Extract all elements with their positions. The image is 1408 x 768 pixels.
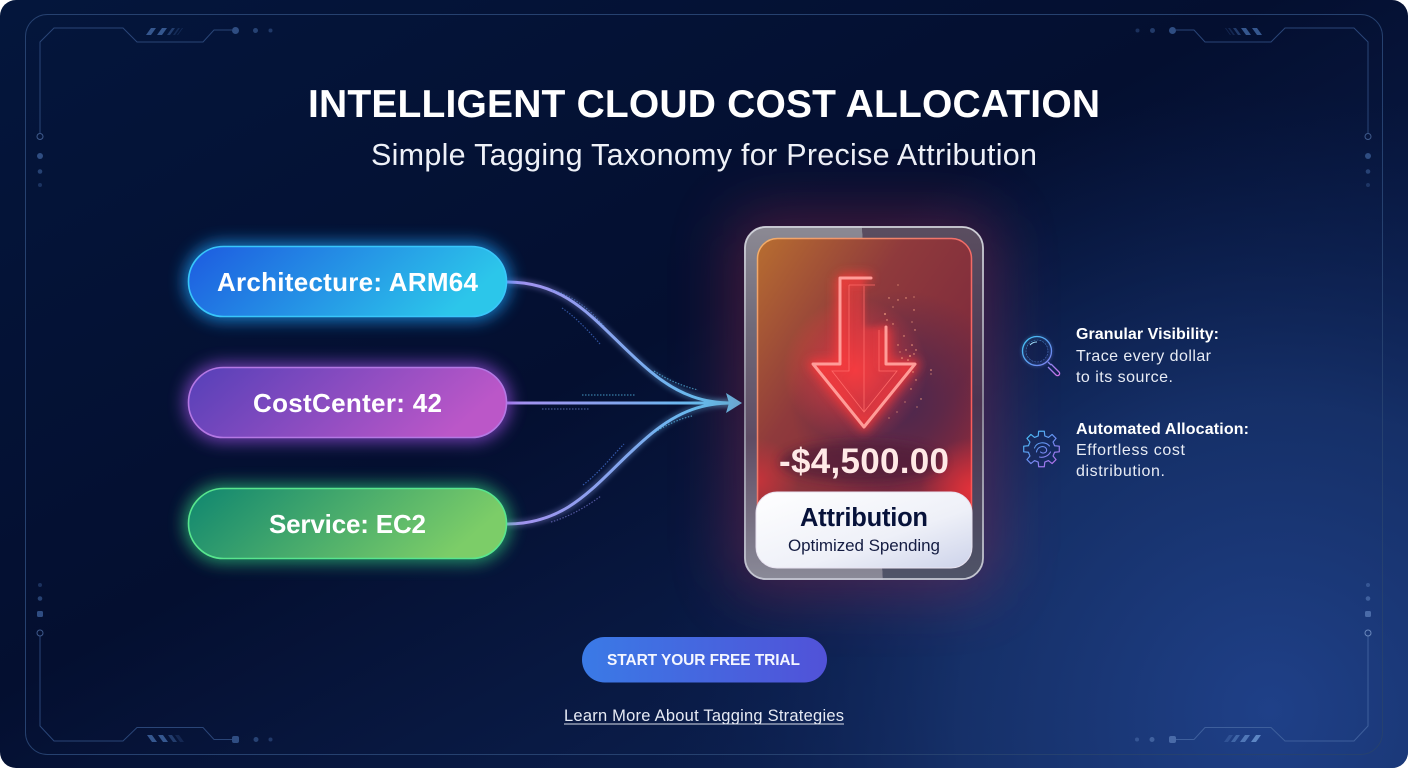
flow connectors — [507, 282, 742, 524]
icon: magnifier — [1022, 336, 1060, 376]
subtitle: Simple Tagging Taxonomy for Precise Attribution — [371, 138, 1037, 172]
text: automated allocation — [1076, 421, 1249, 480]
white attribution panel: Attribution — [800, 504, 928, 532]
text: granular visibility: Granular Visibility: — [1076, 326, 1219, 343]
title: INTELLIGENT CLOUD COST ALLOCATION — [308, 83, 1100, 126]
text: automated allocation: Automated Allocation: — [1076, 421, 1249, 438]
amount: -$4,500.00 — [779, 442, 949, 481]
tag pill: cost center — [184, 363, 511, 442]
text: automated allocation: Effortless cost — [1076, 442, 1186, 459]
cta button: START YOUR FREE TRIAL — [607, 652, 800, 669]
white attribution panel: Optimized Spending — [788, 536, 940, 555]
inner red panel — [757, 238, 972, 556]
tag pill: architecture — [184, 242, 511, 321]
tag pill: cost center: CostCenter: 42 — [253, 388, 442, 418]
white attribution panel — [756, 492, 972, 568]
icon: gear — [1024, 431, 1059, 467]
text: granular visibility: Trace every dollar — [1076, 348, 1212, 365]
card outer glow — [730, 212, 998, 594]
tag pill: service: Service: EC2 — [269, 509, 426, 539]
icon: downward arrow — [813, 278, 915, 427]
learn more link: Learn More About Tagging Strategies — [564, 707, 844, 725]
text: granular visibility: to its source. — [1076, 369, 1173, 386]
cta button — [582, 637, 827, 682]
arrow head — [726, 393, 742, 413]
attribution card — [730, 212, 998, 594]
tag pill: architecture: Architecture: ARM64 — [217, 267, 479, 297]
glass frame — [744, 226, 984, 580]
text: automated allocation: distribution. — [1076, 463, 1165, 480]
particle trails — [542, 290, 698, 522]
text: granular visibility — [1076, 326, 1219, 386]
tag pill: service — [184, 484, 511, 563]
particles — [884, 284, 932, 419]
